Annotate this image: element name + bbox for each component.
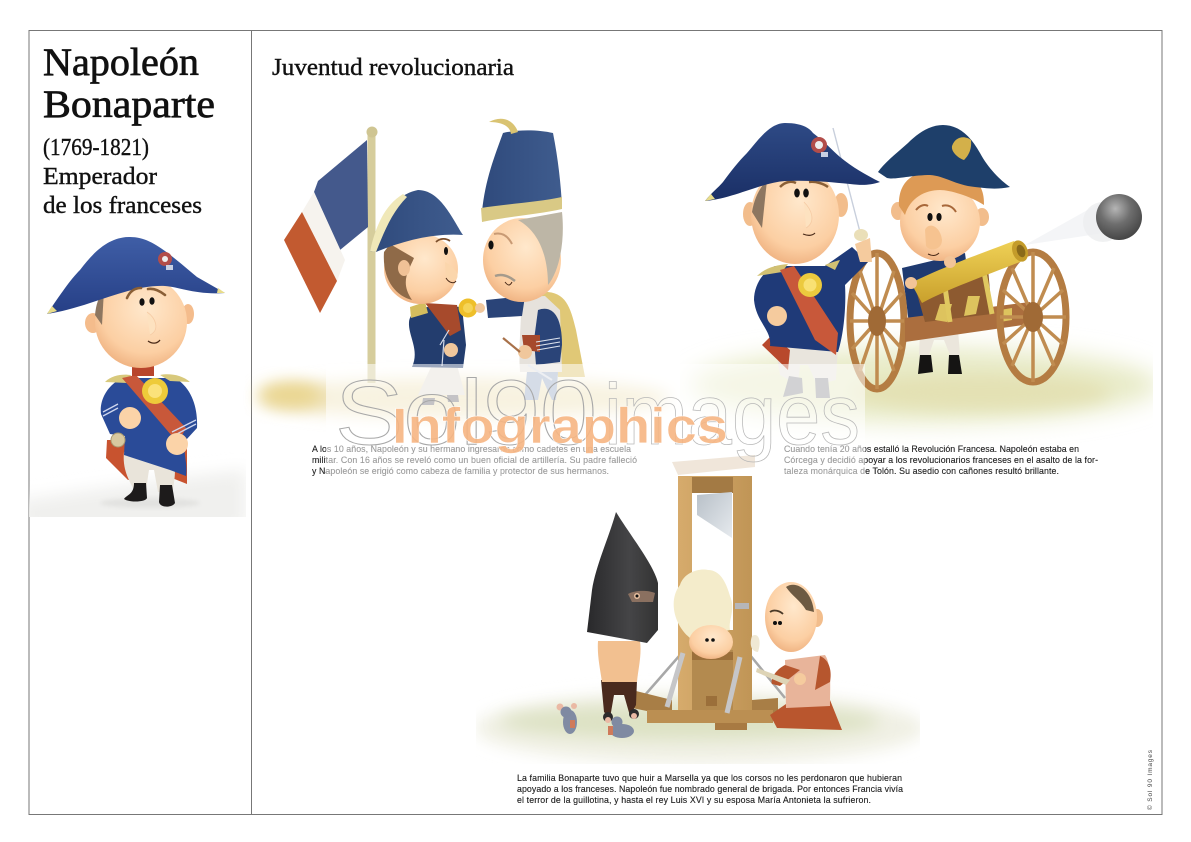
- illustration: Napoleon at the siege cannon: [690, 123, 1160, 423]
- medal handed over: [458, 298, 478, 318]
- text block: first panel: militar. Con 16 años se reveló como un buen oficial de artillería. Su padre falleció: [312, 455, 637, 465]
- general body: [486, 296, 562, 400]
- subtitle: dates and rank: Emperador: [43, 164, 157, 190]
- ears: [85, 313, 101, 333]
- cannonball with trail: [1025, 194, 1142, 245]
- gunner coat: [902, 253, 975, 332]
- face: [95, 276, 187, 368]
- cannon barrel: [911, 238, 1031, 303]
- image credit: © Sol 90 Images: [1146, 749, 1154, 810]
- illustration: Napoleon portrait: [20, 237, 246, 530]
- sword hilt: [111, 433, 125, 447]
- watermark: [326, 362, 865, 476]
- guillotine: [632, 455, 785, 730]
- subtitle: dates and rank: (1769-1821): [43, 135, 149, 161]
- nose and mouth: [147, 312, 156, 335]
- boots: [124, 483, 175, 507]
- Napoleon cape tail: [762, 335, 790, 370]
- legs: [124, 445, 175, 492]
- text block: second panel: [784, 444, 1098, 476]
- gunner hands: [905, 277, 917, 289]
- Napoleon legs and boots: [775, 345, 838, 385]
- priest: [756, 582, 842, 730]
- neck collar: [132, 362, 154, 376]
- ground: [475, 692, 925, 764]
- general cape: [540, 292, 585, 377]
- medal star: [798, 273, 822, 297]
- section heading: Juventud revolucionaria: [272, 55, 514, 81]
- text block: third panel: [517, 773, 903, 805]
- queen: [674, 570, 760, 659]
- carriage: [905, 268, 1030, 342]
- general tall hat: [481, 119, 562, 222]
- text block: third panel: apoyado a los franceses. Napoleón fue nombrado general de brigada. Por entonces Francia vivía: [517, 784, 903, 794]
- text block: second panel: Córcega y decidió apoyar a los revolucionarios franceses en el asalto de la for-: [784, 455, 1098, 465]
- executioner: [587, 512, 658, 722]
- epaulettes: [757, 260, 840, 276]
- sash: [122, 375, 186, 443]
- hand at the hip: [767, 306, 787, 326]
- hat: [47, 237, 225, 314]
- text block: first panel: A los 10 años, Napoleón y su hermano ingresaron como cadetes en una escuela: [312, 444, 631, 454]
- Napoleon head: [743, 166, 848, 264]
- cockade: [158, 252, 172, 266]
- watermark: images: [604, 367, 860, 463]
- sword: [833, 128, 860, 232]
- left wheel: [850, 253, 904, 389]
- right wheel: [1000, 252, 1066, 382]
- young Napoleon body: [409, 302, 466, 405]
- epaulettes: [105, 374, 190, 383]
- text block: first panel: [312, 444, 637, 476]
- Napoleon coat: [754, 247, 868, 352]
- text block: first panel: y Napoleón se erigió como cabeza de familia y protector de sus hermanos.: [312, 466, 609, 476]
- text block: second panel: Cuando tenía 20 años estalló la Revolución Francesa. Napoleón estaba en: [784, 444, 1079, 454]
- cape tails: [106, 440, 187, 484]
- general head: [483, 212, 563, 302]
- gunner head: [891, 170, 989, 261]
- watermark: Sol90: [335, 362, 597, 464]
- gunner legs and boots: [919, 330, 960, 358]
- sash: [780, 266, 838, 355]
- title: Napoleón: [43, 41, 199, 84]
- young Napoleon head: [370, 190, 463, 304]
- text block: second panel: taleza monárquica de Tolón. Su asedio con cañones resultó brillante.: [784, 466, 1059, 476]
- raised hand: [855, 238, 872, 262]
- subtitle: dates and rank: [43, 135, 202, 219]
- coat: [101, 378, 197, 476]
- eyes and brows: [139, 298, 145, 306]
- Napoleon hat: [705, 123, 880, 201]
- subtitle: dates and rank: de los franceses: [43, 193, 202, 219]
- ground: [260, 378, 670, 418]
- illustration: guillotine scene: [475, 455, 925, 764]
- watermark: Infographics: [392, 398, 728, 454]
- cuff lines: [103, 404, 196, 436]
- mice: [556, 703, 637, 738]
- title: [43, 41, 215, 126]
- flagpole: [368, 133, 376, 383]
- title: Bonaparte: [43, 83, 215, 126]
- text block: third panel: el terror de la guillotina, y hasta el rey Luis XVI y su esposa María Antonieta la sufrieron.: [517, 795, 871, 805]
- ground: [690, 347, 1160, 423]
- text block: third panel: La familia Bonaparte tuvo que huir a Marsella ya que los corsos no les perdonaron que hubieran: [517, 773, 902, 783]
- medal star: [142, 378, 168, 404]
- illustration: young Napoleon and general: [258, 119, 670, 418]
- flag: [284, 140, 368, 313]
- hands: [119, 407, 141, 429]
- gunner hat: [878, 125, 1010, 189]
